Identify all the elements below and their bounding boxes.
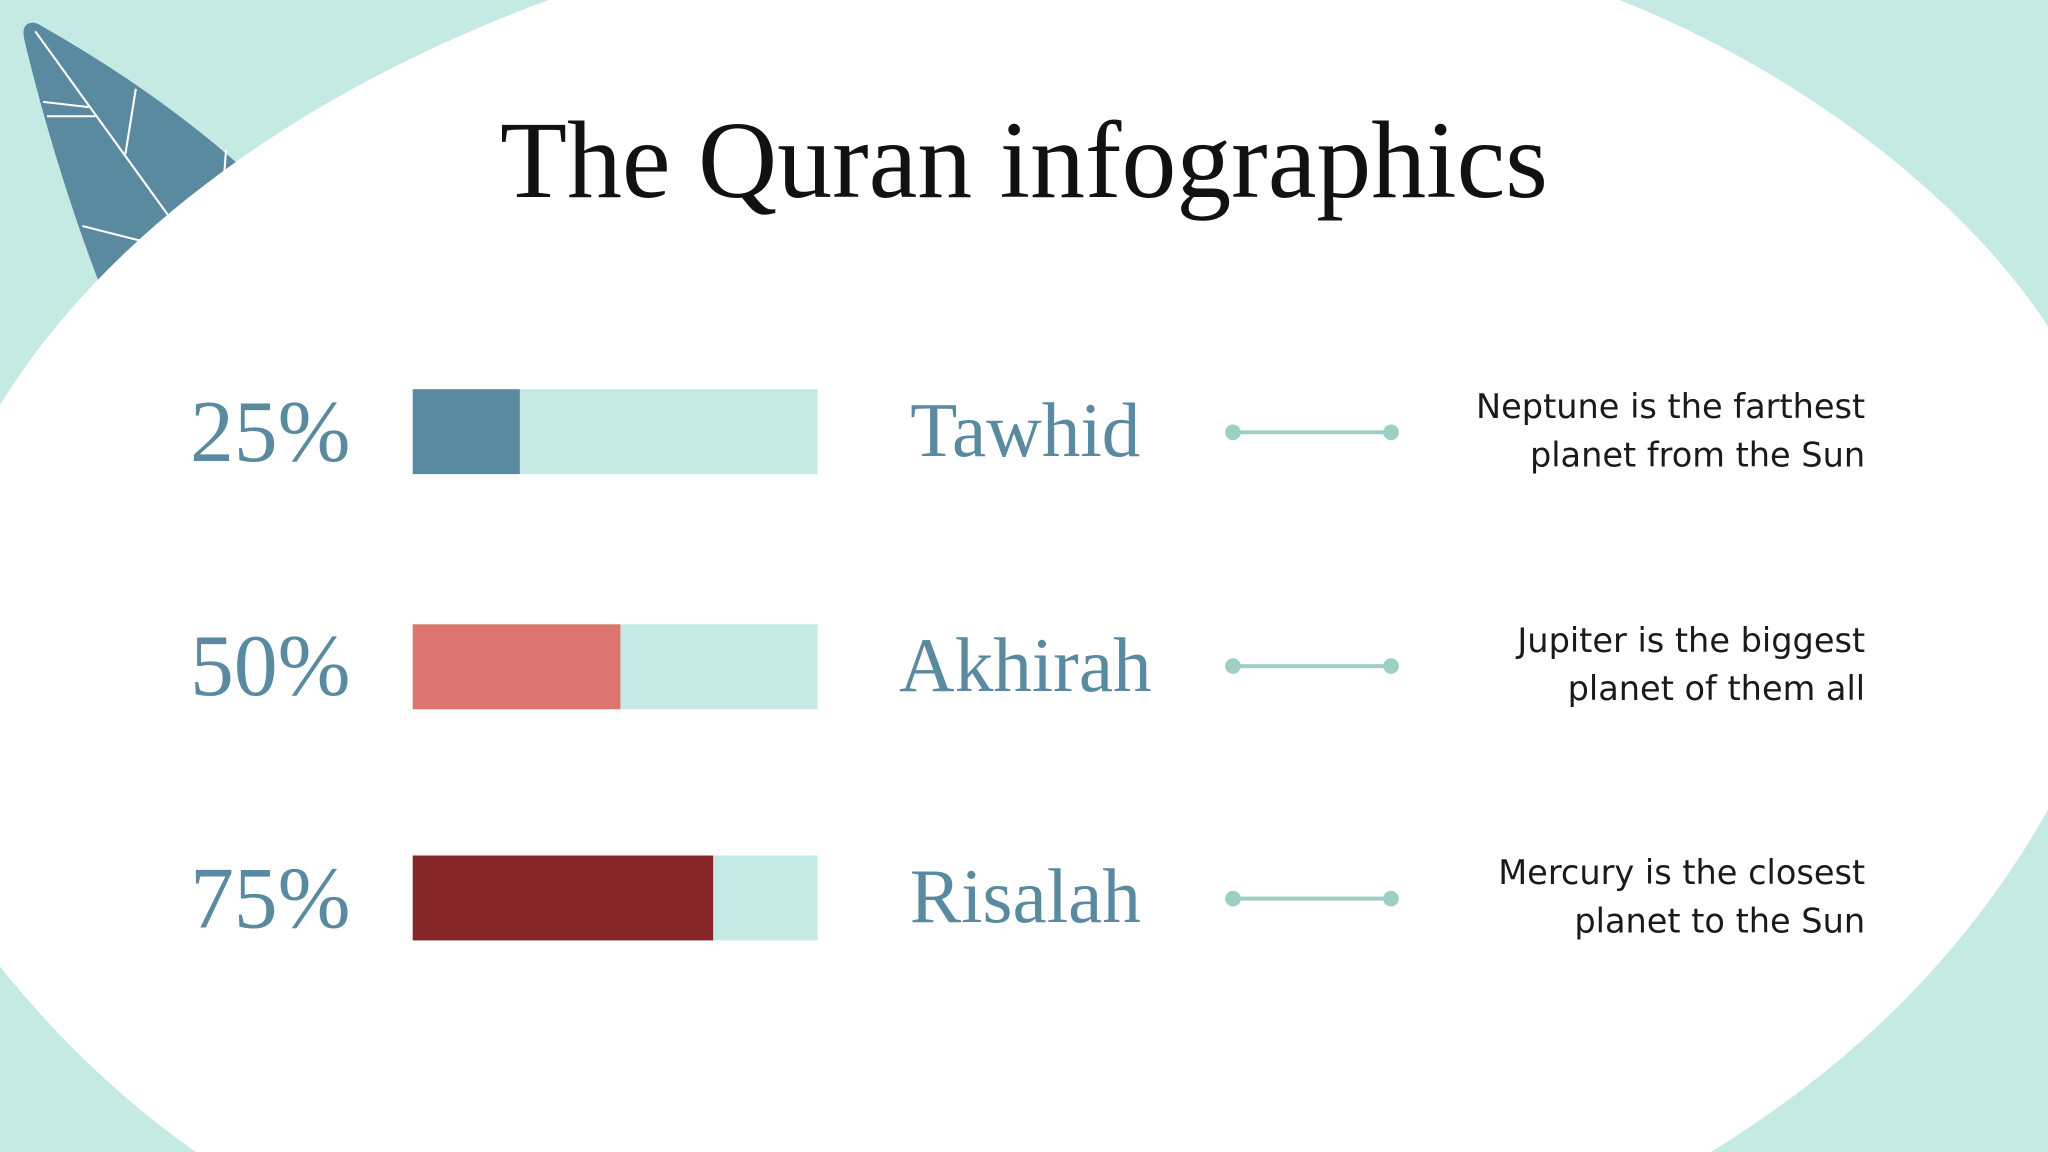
- description: planet from the Sun: [1530, 436, 1865, 475]
- title: The Quran infographics: [500, 101, 1548, 222]
- percentage 50%: 50%: [190, 618, 351, 714]
- description: Jupiter is the biggest: [1517, 622, 1865, 661]
- bar 75%: [413, 856, 818, 940]
- label Risalah: Risalah: [910, 853, 1141, 939]
- description: [1476, 388, 1865, 475]
- description: planet of them all: [1568, 670, 1865, 709]
- connector: [1225, 890, 1399, 906]
- percentage 25%: 25%: [190, 384, 351, 481]
- row 1: [190, 384, 1865, 481]
- connector: [1225, 658, 1399, 674]
- row 3: [190, 850, 1865, 947]
- icon: leaf: [24, 23, 248, 340]
- description: planet to the Sun: [1574, 903, 1865, 942]
- row 2: [190, 618, 1865, 714]
- description: [1498, 854, 1865, 942]
- bar 50%: [413, 624, 818, 709]
- description: Mercury is the closest: [1498, 854, 1865, 893]
- label Tawhid: Tawhid: [910, 387, 1140, 473]
- connector: [1225, 424, 1399, 440]
- description: Neptune is the farthest: [1476, 388, 1865, 427]
- label Akhirah: Akhirah: [899, 622, 1152, 708]
- description: [1516, 622, 1865, 709]
- percentage 75%: 75%: [190, 850, 351, 947]
- bar 25%: [413, 389, 818, 474]
